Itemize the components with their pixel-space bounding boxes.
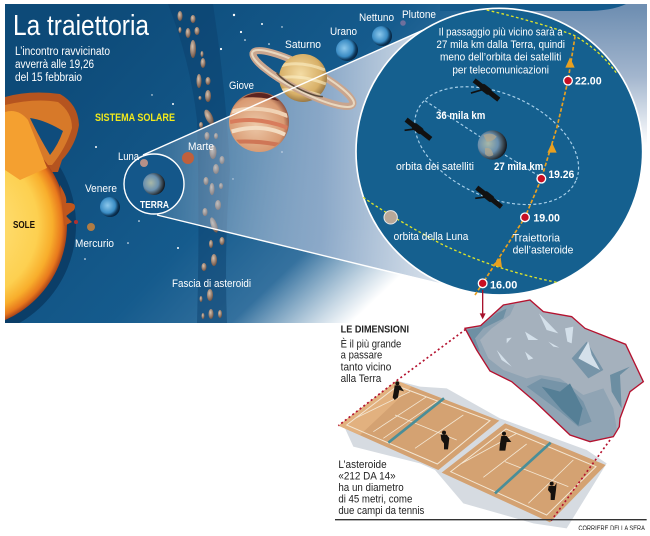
- callout text: meno dell’orbita dei satelliti: [440, 52, 561, 64]
- planet labels: Plutone: [402, 9, 436, 21]
- planet: Venere: [100, 197, 120, 217]
- planet labels: Nettuno: [359, 12, 394, 24]
- callout text: Il passaggio più vicino sarà a: [439, 26, 563, 38]
- stars: [84, 14, 283, 260]
- sun: [5, 92, 79, 323]
- court shadow: [345, 381, 607, 528]
- panel: solar system background: [0, 4, 647, 338]
- panel: le dimensioni: [335, 290, 647, 533]
- planet labels: Saturno: [285, 39, 321, 51]
- asteroid: [465, 300, 643, 442]
- planet: Marte: [182, 152, 194, 164]
- planet: Urano: [336, 39, 358, 61]
- planet: Saturno: [250, 47, 356, 110]
- asteroid description: due campi da tennis: [338, 505, 425, 517]
- subtitle text: avverrà alle 19,26: [15, 59, 94, 71]
- planet: Nettuno: [372, 26, 392, 46]
- label: sole: SOLE: [13, 219, 35, 231]
- small circle: Terra e Luna: [124, 154, 184, 214]
- dimensions text: È il più grande: [341, 337, 401, 350]
- diagram labels: orbita dei satelliti: [396, 161, 474, 173]
- subtitle text: del 15 febbraio: [15, 72, 82, 84]
- tennis court right: [442, 423, 606, 522]
- baseline: [335, 518, 647, 522]
- planet: Giove: [228, 92, 290, 152]
- callout text: 27 mila km dalla Terra, quindi: [436, 39, 565, 51]
- panel: big zoom circle: [356, 8, 643, 295]
- planet labels: Marte: [188, 141, 214, 153]
- small circle: Terra e Luna: TERRA: [140, 199, 169, 211]
- asteroids: [178, 11, 224, 319]
- diagram labels: 27 mila km: [494, 161, 544, 173]
- time labels: 19.00: [533, 212, 560, 224]
- moon: [384, 211, 397, 224]
- heading: LE DIMENSIONI: [341, 324, 409, 335]
- red dotted dimension lines: [338, 329, 610, 522]
- asteroid description: [338, 459, 425, 517]
- subtitle text: [15, 46, 110, 84]
- asteroid belt band: [168, 4, 230, 323]
- asteroid trajectory: [475, 37, 575, 295]
- diagram labels: dell’asteroide: [513, 244, 573, 256]
- time labels: [490, 76, 602, 292]
- planet labels: Luna: [118, 151, 140, 163]
- radius lines: [425, 101, 540, 177]
- planet: Mercurio: [87, 223, 95, 231]
- diagram labels: [394, 110, 573, 256]
- diagram labels: Traiettoria: [513, 233, 561, 245]
- planet labels: Giove: [229, 80, 254, 92]
- asteroid description: L’asteroide: [338, 459, 387, 471]
- dimensions text: alla Terra: [341, 373, 382, 385]
- red arrow: [480, 290, 486, 319]
- asteroid description: di 45 metri, come: [338, 494, 412, 506]
- callout text: [436, 26, 565, 77]
- planet: Plutone: [400, 20, 406, 26]
- tennis court left: [338, 381, 499, 470]
- subtitle text: L’incontro ravvicinato: [15, 46, 110, 58]
- time markers: [478, 76, 572, 288]
- title: La traiettoria: [13, 10, 150, 42]
- dimensions text: [341, 337, 401, 385]
- players: [393, 381, 557, 500]
- planet labels: Mercurio: [75, 238, 114, 250]
- asteroid description: ha un diametro: [338, 482, 404, 494]
- planet labels: Venere: [85, 183, 117, 195]
- dimensions text: tanto vicino: [341, 361, 391, 373]
- lines of the cone: [143, 27, 440, 284]
- satellite icons: [400, 78, 504, 214]
- time labels: 22.00: [575, 76, 602, 88]
- diagram labels: 36 mila km: [436, 110, 486, 122]
- time labels: 16.00: [490, 280, 517, 292]
- diagram labels: orbita della Luna: [394, 231, 469, 243]
- dimensions text: a passare: [341, 350, 382, 362]
- earth: [478, 130, 507, 160]
- moon orbit: [363, 10, 617, 283]
- time labels: 19.26: [548, 169, 574, 181]
- planet labels: Fascia di asteroidi: [172, 278, 251, 290]
- satellite orbit: [396, 63, 597, 228]
- label: sistema solare: SISTEMA SOLARE: [95, 112, 175, 124]
- cone from small circle to big circle: [143, 27, 440, 283]
- asteroid description: «212 DA 14»: [338, 471, 396, 483]
- arrow heads: [493, 57, 575, 268]
- callout text: per telecomunicazioni: [452, 65, 549, 77]
- planet labels: Urano: [330, 26, 357, 38]
- planet labels: [75, 9, 436, 290]
